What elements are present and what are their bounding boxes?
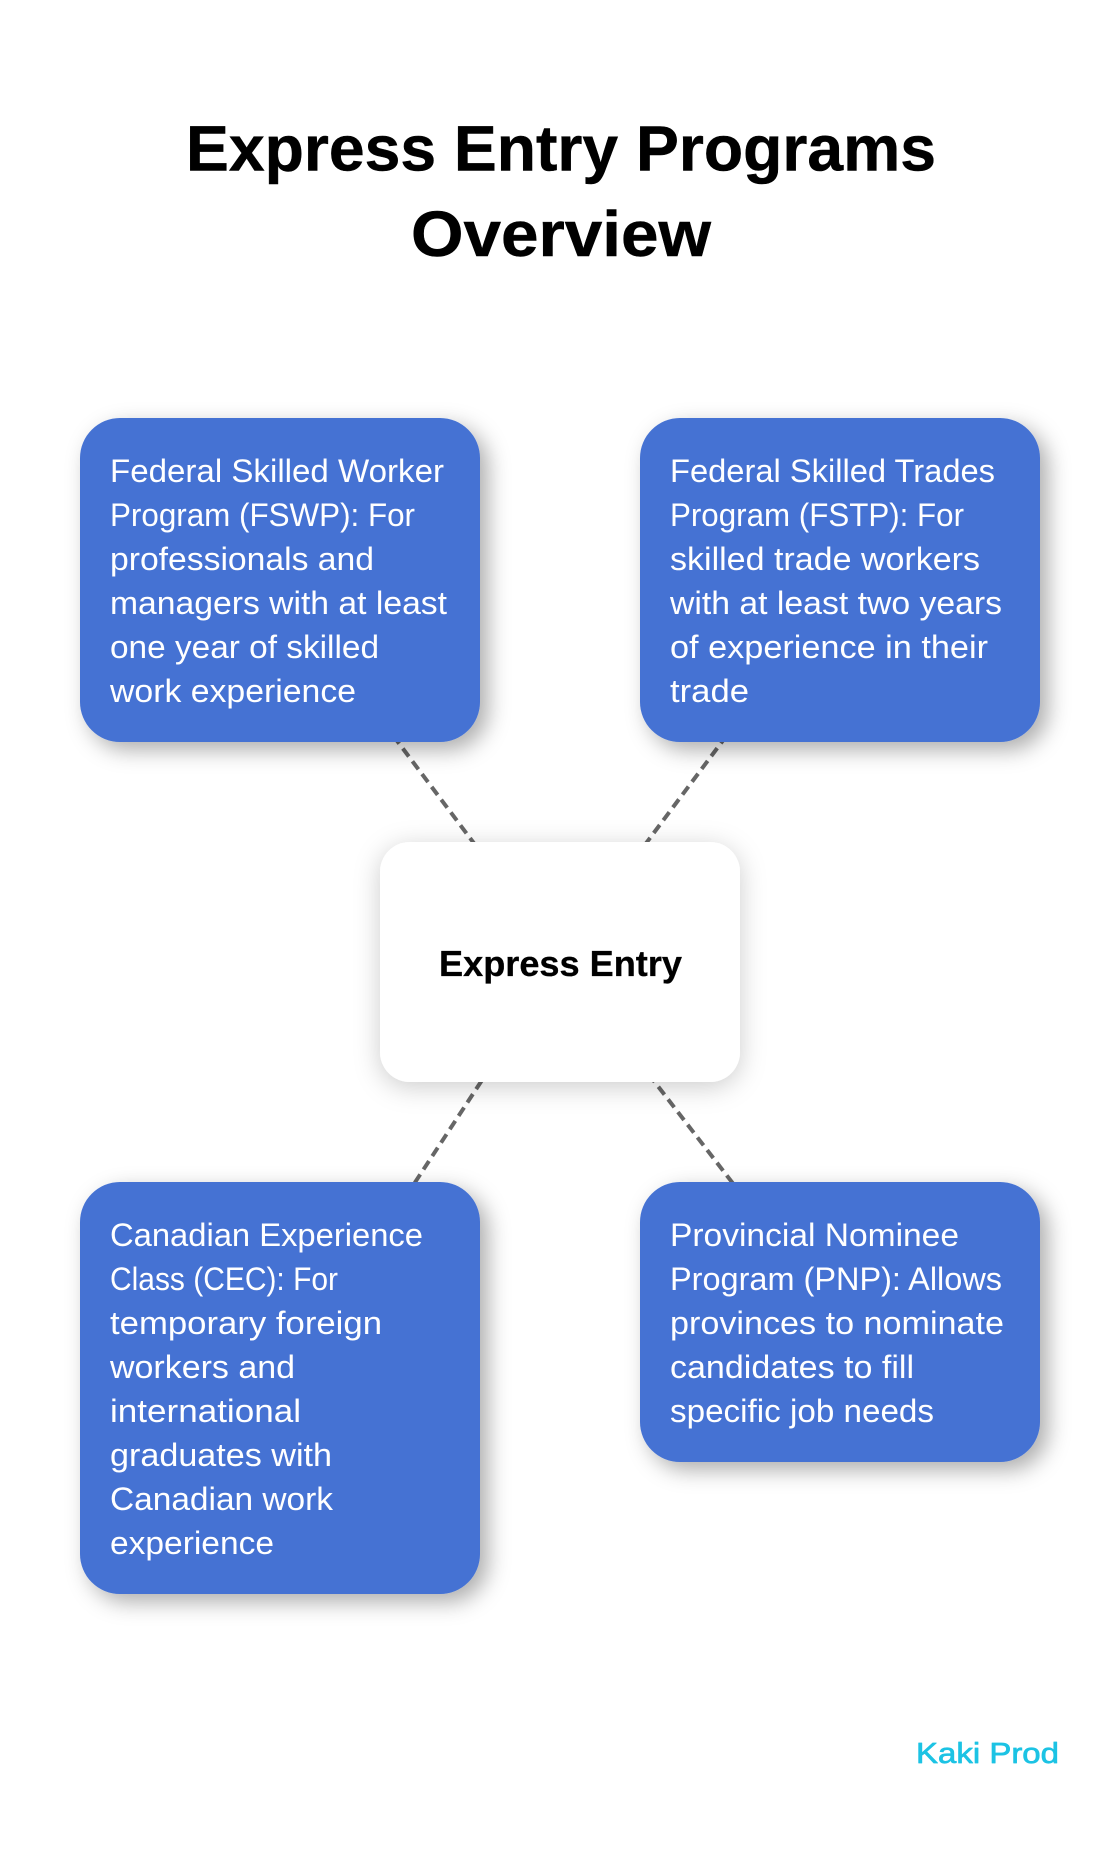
panel: Federal Skilled Trades Program: skilled trade workers	[670, 541, 980, 577]
panel: Provincial Nominee Program: provinces to nominate	[670, 1305, 1004, 1341]
title: Express Entry Programs	[186, 112, 936, 184]
panel: Federal Skilled Worker Program	[80, 418, 480, 742]
panel: Canadian Experience Class	[80, 1182, 480, 1594]
panel: Provincial Nominee Program: Program (PNP): Allows	[670, 1261, 1002, 1297]
panel: Provincial Nominee Program: Provincial Nominee	[670, 1217, 959, 1253]
panel: Federal Skilled Worker Program: one year of skilled	[110, 629, 379, 665]
panel: Federal Skilled Worker Program: managers with at least	[110, 585, 447, 621]
title	[186, 112, 936, 270]
panel: Federal Skilled Trades Program: with at least two years	[669, 585, 1002, 621]
panel: Federal Skilled Trades Program: Federal Skilled Trades	[670, 453, 995, 489]
panel: Federal Skilled Worker Program: Program (FSWP): For	[110, 497, 415, 533]
panel: Canadian Experience Class: Canadian Experience	[110, 1217, 423, 1253]
panel: Provincial Nominee Program: specific job needs	[670, 1393, 934, 1429]
panel: Provincial Nominee Program	[640, 1182, 1040, 1462]
panel: Canadian Experience Class: international	[110, 1393, 301, 1429]
panel: Federal Skilled Trades Program: Program (FSTP): For	[670, 497, 964, 533]
panel: Canadian Experience Class: temporary foreign	[110, 1305, 382, 1341]
dashed connector lines	[384, 722, 738, 1190]
title: Overview	[411, 198, 711, 270]
panel: Express Entry centre: Express Entry	[439, 943, 682, 984]
panel: Canadian Experience Class: Class (CEC): For	[110, 1261, 338, 1297]
panel: Canadian Experience Class: Canadian work	[110, 1481, 334, 1517]
panel: Federal Skilled Trades Program: trade	[670, 673, 749, 709]
panel: Canadian Experience Class: workers and	[109, 1349, 295, 1385]
panel: Federal Skilled Trades Program	[640, 418, 1040, 742]
panel: Express Entry centre	[380, 842, 740, 1082]
panel: Canadian Experience Class: graduates with	[110, 1437, 332, 1473]
panel: Provincial Nominee Program: candidates to fill	[670, 1349, 914, 1385]
panel: Federal Skilled Worker Program: work experience	[109, 673, 356, 709]
logo: Kaki Prod: Kaki Prod	[916, 1738, 1059, 1770]
panel: Federal Skilled Worker Program: Federal Skilled Worker	[110, 453, 444, 489]
panel: Federal Skilled Worker Program: professionals and	[110, 541, 374, 577]
panel: Canadian Experience Class: experience	[110, 1525, 274, 1561]
panel: Federal Skilled Trades Program: of experience in their	[670, 629, 988, 665]
